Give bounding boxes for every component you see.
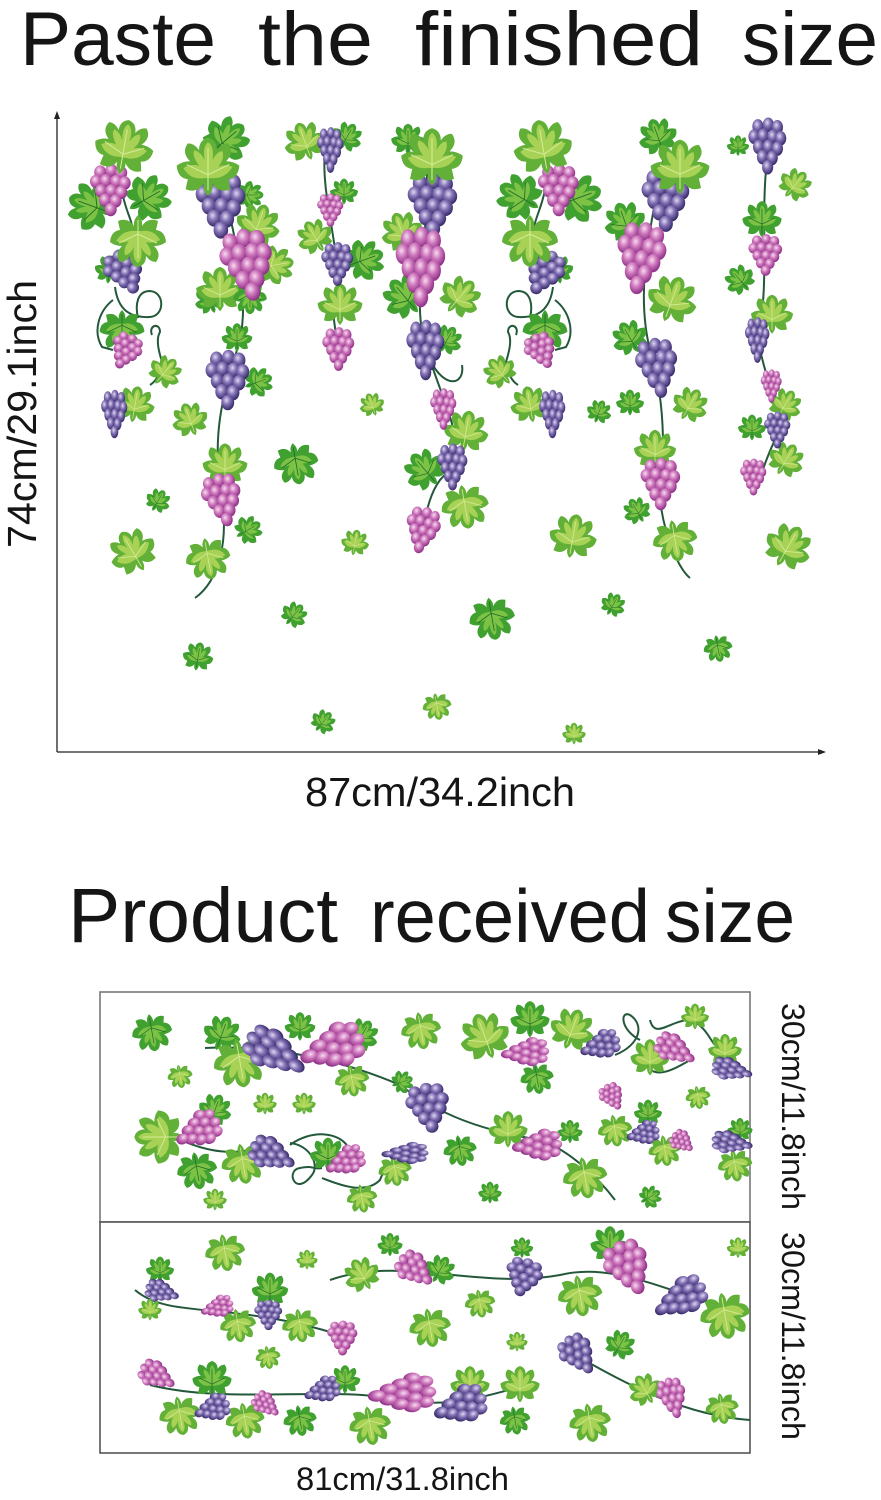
sheet size label bottom: 30cm/11.8inch [775, 1232, 811, 1440]
grape vine 1 [61, 115, 188, 438]
title: product received size [68, 873, 795, 959]
title: product received size: size [665, 874, 795, 958]
grape vine 7 [719, 117, 818, 495]
height label: 74cm/29.1inch [0, 280, 45, 548]
scattered falling leaves [101, 389, 820, 744]
title: paste the finished size [20, 0, 878, 82]
sheet 1 leaves [129, 1001, 755, 1215]
grape vine 4 [374, 124, 492, 557]
sheet 1 vines [170, 1014, 715, 1200]
sheet 2 frame [100, 1222, 750, 1453]
panel: sticker sheet 1 [100, 992, 755, 1222]
title: product received size: received [370, 874, 650, 958]
grape vine 2 [167, 107, 297, 598]
sheet size label top: 30cm/11.8inch [775, 1003, 811, 1210]
width label: 87cm/34.2inch [305, 769, 575, 815]
sheet 1 grapes [168, 1015, 755, 1183]
sheet 2 leaves [138, 1226, 754, 1449]
chart axes with arrows [54, 111, 826, 755]
sheet 2 grapes [133, 1232, 714, 1433]
sheet 2 vines [135, 1271, 750, 1420]
panel: finished wall decal [61, 107, 820, 744]
grape vine 5 [477, 115, 609, 438]
title: product received size: Product [68, 873, 338, 959]
sheet 1 frame [100, 992, 750, 1222]
grape vine 3 [278, 116, 390, 371]
sheet width label: 81cm/31.8inch [296, 1461, 509, 1497]
panel: sticker sheet 2 [100, 1222, 754, 1453]
grape vine 6 [598, 113, 715, 578]
